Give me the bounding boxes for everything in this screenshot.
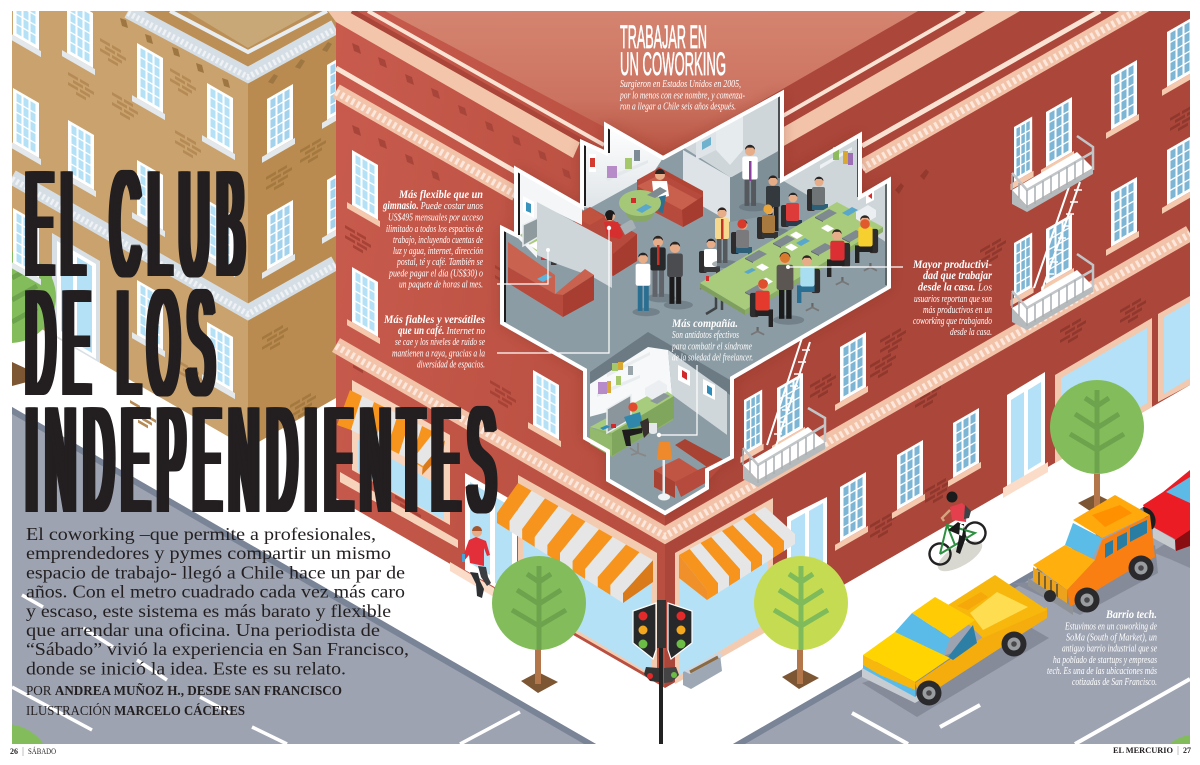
tan mid cornice	[12, 177, 335, 314]
person on left sofa	[604, 210, 636, 239]
lower belt cornice	[336, 233, 1190, 536]
tree on right sidewalk	[1050, 380, 1144, 515]
walking man	[462, 526, 491, 598]
group of three people	[632, 236, 693, 316]
corner tree at lower right	[1169, 735, 1190, 744]
yellow pickup	[862, 575, 1049, 717]
reception desk	[508, 242, 594, 317]
callout: más fiables y versátiles que un café: que un café. Internet no	[398, 325, 485, 337]
trash bin	[649, 423, 657, 434]
tan windows left face	[8, 0, 235, 399]
upper fire escape balcony	[1012, 136, 1093, 212]
receptionist	[540, 227, 562, 265]
callout: mayor productividad: dad que trabajar	[923, 270, 992, 282]
tan roof cornice	[128, 11, 335, 77]
callout: más flexible que un gimnasio: postal, té y café. También se	[396, 256, 483, 268]
red building windows right	[740, 16, 1195, 551]
planter box	[683, 652, 723, 689]
text: article intro: donde se inició la idea. Este es su relato.	[26, 659, 346, 679]
lounge sofa left	[573, 207, 637, 276]
callout: más fiables y versátiles que un café	[383, 314, 485, 370]
callout: más compañía	[671, 318, 753, 364]
cutaway hole: coworking office	[502, 93, 889, 513]
traffic light	[633, 600, 692, 744]
left roof cornice	[328, 11, 604, 195]
text: intro coworking	[619, 78, 745, 112]
standing man with orange hair	[773, 252, 804, 325]
upper left storefront	[340, 380, 458, 548]
cutaway shadow	[502, 93, 889, 513]
text: article intro: años. Con el metro cuadrado cada vez más caro	[26, 582, 405, 602]
callout: más flexible que un gimnasio	[382, 189, 483, 290]
tan wall vents	[120, 18, 332, 88]
storefront shop windows right	[1055, 296, 1190, 463]
red car	[1143, 470, 1190, 568]
green desk	[590, 388, 674, 457]
right roof cornice	[781, 2, 1150, 168]
roof	[385, 11, 918, 158]
callout: barrio tech: Barrio tech.	[1105, 609, 1157, 621]
callout: más compañía: para combatir el síndrome	[671, 340, 752, 352]
tree yellow green at corner	[754, 556, 848, 689]
person on sofa	[652, 169, 669, 213]
text: article intro: espacio de trabajo- llegó a Chile hace un par de	[26, 562, 405, 582]
text: article intro: que arrendar una oficina. Una periodista de	[26, 620, 380, 640]
right awning main	[679, 507, 795, 600]
ladder upper fire escape	[1034, 178, 1082, 290]
dark wall edges	[502, 125, 610, 322]
red building windows left	[347, 147, 561, 447]
left awning main	[497, 483, 653, 603]
callout: mayor productividad: usuarios reportan que son	[914, 293, 992, 305]
corner tree at lower left	[12, 724, 44, 744]
callout: más flexible que un gimnasio: trabajo, incluyendo cuentas de	[393, 234, 483, 246]
callout: barrio tech: cotizadas de San Francisco.	[1072, 676, 1157, 688]
footer left: page number and section	[10, 746, 56, 756]
floor lamp	[657, 442, 672, 500]
illustrated scene and captions: TRABAJAR EN	[620, 19, 707, 55]
man with purple tie	[739, 145, 768, 211]
callout: más flexible que un gimnasio: luz y agua, internet, dirección	[393, 245, 483, 257]
callout leader lines	[497, 228, 903, 435]
seated worker lower room	[622, 402, 651, 456]
white back wall with shelf	[582, 125, 663, 208]
wall vents on red building	[352, 43, 571, 181]
round table with laptop	[619, 187, 667, 222]
right meeting room wall	[782, 135, 889, 285]
red building left face	[336, 11, 665, 688]
street: left road	[12, 407, 596, 744]
footer left: page number and section: SÁBADO	[28, 746, 56, 756]
callout dots	[546, 226, 790, 437]
title: el club de los independientes: DE LOS	[26, 258, 222, 428]
callout: más flexible que un gimnasio: Más flexible que un	[398, 189, 483, 201]
door near walking man	[450, 473, 517, 600]
callout: mayor productividad: desde la casa.	[950, 326, 992, 338]
illustrated scene and captions: UN COWORKING	[620, 46, 726, 82]
red building right face	[665, 11, 1190, 688]
white cut edge of hole	[502, 93, 889, 513]
callout: más flexible que un gimnasio: un paquete de horas al mes.	[399, 278, 483, 290]
man with yellow shirt	[712, 207, 738, 268]
middle fire escape balcony	[1012, 254, 1093, 330]
tree green at corner	[492, 556, 586, 693]
monitor and printer	[600, 380, 670, 433]
callout: barrio tech	[1047, 609, 1157, 688]
callout: barrio tech: Estuvimos en un coworking de	[1064, 620, 1157, 632]
floor	[504, 148, 887, 460]
tan bricks	[68, 38, 204, 433]
callout: barrio tech: antiguo barrio industrial que se	[1062, 642, 1157, 654]
awning upper left	[337, 390, 445, 475]
tan windows right face	[262, 60, 336, 279]
ladder lower fire escape	[767, 338, 810, 446]
callout: más compañía: Más compañía.	[671, 318, 738, 330]
lower room back	[590, 332, 730, 440]
callout: mayor productividad: coworking que trabajando	[913, 315, 992, 327]
text: article intro: emprendedores y pymes compartir un mismo	[26, 543, 391, 563]
callout: mayor productividad: Mayor productivi-	[912, 259, 992, 271]
text: intro coworking: por lo menos con ese nombre, y comenza-	[619, 90, 745, 102]
tan building	[12, 11, 336, 444]
heading: trabajar en un coworking	[620, 19, 726, 82]
callout: más flexible que un gimnasio: gimnasio. Puede costar unos	[382, 200, 483, 212]
callout: más fiables y versátiles que un café: Más fiables y versátiles	[383, 314, 485, 326]
meeting table	[700, 202, 883, 315]
reception partition	[537, 202, 612, 288]
door on right facade	[1003, 372, 1048, 498]
title: el club de los independientes	[25, 139, 504, 520]
callout: mayor productividad: desde la casa. Los	[918, 282, 992, 294]
orange jeep	[1013, 495, 1158, 615]
reception picture	[523, 196, 534, 218]
callout: más flexible que un gimnasio: US$495 mensuales por acceso	[388, 212, 483, 224]
byline	[26, 681, 342, 719]
lower fire escape balcony	[743, 408, 825, 487]
door beside right awning	[787, 497, 827, 564]
people at near side of table	[750, 215, 878, 335]
text: article intro: y escaso, este sistema es más barato y flexible	[26, 601, 391, 621]
callout: más fiables y versátiles que un café: diversidad de espacios.	[417, 358, 485, 370]
text: article intro: El coworking –que permite a profesionales,	[26, 524, 376, 544]
people at far side of table	[699, 177, 828, 289]
reception green desk and monitor	[520, 217, 562, 263]
callout: mayor productividad: más productivos en un	[923, 304, 992, 316]
callout: barrio tech: SoMa (South of Market), un	[1066, 632, 1157, 644]
text: article intro: “Sábado” vivió la experiencia en San Francisco,	[26, 639, 409, 659]
kitchen wall and appliances	[683, 93, 782, 222]
reception white wall	[516, 169, 582, 258]
lower room sofa	[654, 439, 724, 498]
brick clusters	[345, 225, 521, 528]
footer left: page number and section: 26	[10, 747, 18, 756]
cyclist	[926, 492, 989, 577]
standing woman	[763, 175, 789, 236]
callout: más compañía: Son antídotos efectivos	[672, 329, 739, 341]
callout: más compañía: de la soledad del freelancer.	[672, 352, 753, 364]
tan building storefront	[52, 233, 100, 363]
callout: más flexible que un gimnasio: ilimitado a todos los espacios de	[386, 223, 483, 235]
left corner storefront	[518, 475, 657, 680]
callout: más flexible que un gimnasio: puede pagar el día (US$30) o	[388, 268, 483, 280]
lounge sofa right	[637, 167, 703, 227]
byline: POR ANDREA MUÑOZ H., DESDE SAN FRANCISCO	[26, 681, 342, 699]
byline: ILUSTRACIÓN MARCELO CÁCERES	[26, 702, 245, 719]
footer right: newspaper and page number: 27	[1183, 746, 1191, 755]
callout: más fiables y versátiles que un café: se cae y los niveles de ruido se	[395, 336, 485, 348]
text: intro coworking: Surgieron en Estados Unidos en 2005,	[620, 78, 741, 90]
callout: mayor productividad	[912, 259, 992, 338]
street: right road	[733, 506, 1190, 744]
text: article intro	[26, 524, 409, 679]
title: el club de los independientes: EL CLUB	[26, 139, 253, 309]
text: intro coworking: ron a llegar a Chile seis años después.	[620, 100, 736, 112]
right corner storefront	[675, 498, 773, 684]
footer right: newspaper and page number: EL MERCURIO	[1113, 746, 1173, 755]
lower room floor	[585, 395, 727, 513]
tree beside tan building	[12, 251, 56, 386]
callout: más fiables y versátiles que un café: mantienen a raya, gracias a la	[392, 348, 485, 360]
